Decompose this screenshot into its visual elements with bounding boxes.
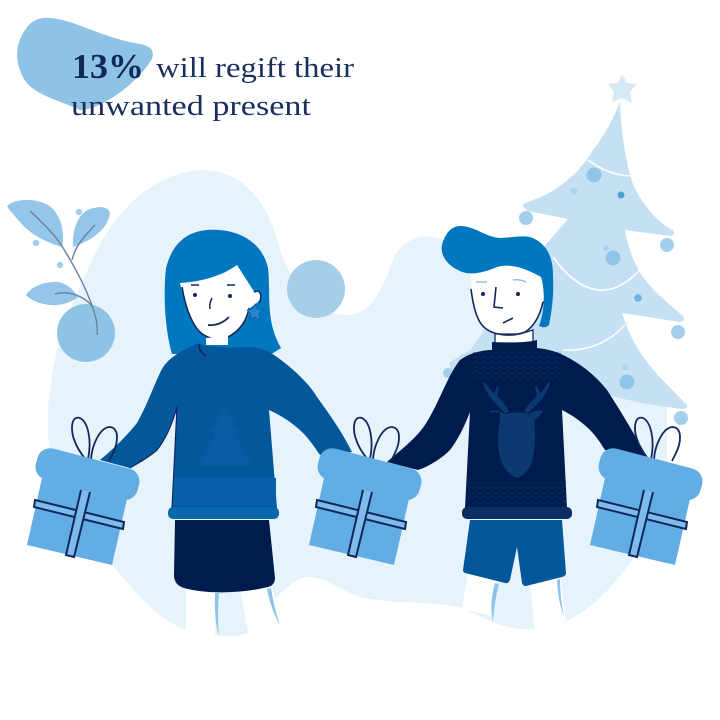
woman face xyxy=(180,265,260,339)
christmas tree xyxy=(443,74,688,425)
sweater hem xyxy=(168,507,279,519)
white gaps between legs xyxy=(186,573,566,640)
title: unwanted present xyxy=(71,90,311,122)
sweater tree motif xyxy=(198,405,252,466)
man face xyxy=(470,270,549,335)
gift: right xyxy=(590,418,705,565)
man eyebrows xyxy=(476,280,526,282)
woman xyxy=(100,230,352,636)
shorts xyxy=(463,520,566,586)
man neck xyxy=(495,330,533,343)
man sweater xyxy=(387,340,647,508)
earring star xyxy=(247,304,263,320)
gift: left xyxy=(27,418,142,565)
title xyxy=(71,47,354,122)
deer motif xyxy=(483,382,550,478)
gift: middle xyxy=(309,418,424,565)
man xyxy=(387,226,647,622)
man hair xyxy=(442,226,553,327)
tree star xyxy=(608,74,637,103)
sweater hem xyxy=(462,507,572,519)
woman neck xyxy=(206,336,228,345)
plant branch xyxy=(7,200,115,362)
man face outline xyxy=(471,287,550,335)
background blob xyxy=(48,170,667,636)
woman eyes and mouth xyxy=(191,285,235,325)
title blob xyxy=(17,18,153,110)
floating ball xyxy=(287,260,345,318)
title: will regift their xyxy=(156,52,354,84)
ornaments xyxy=(443,168,688,425)
woman sweater xyxy=(100,343,352,508)
sweater pattern bands xyxy=(473,352,561,380)
woman legs xyxy=(215,593,219,636)
woman hair xyxy=(165,230,281,355)
collar line xyxy=(199,344,206,356)
skirt xyxy=(174,520,275,592)
garlands xyxy=(553,160,640,350)
man legs xyxy=(491,583,499,622)
sleeve outline xyxy=(130,407,177,508)
title: 13% xyxy=(72,47,144,86)
